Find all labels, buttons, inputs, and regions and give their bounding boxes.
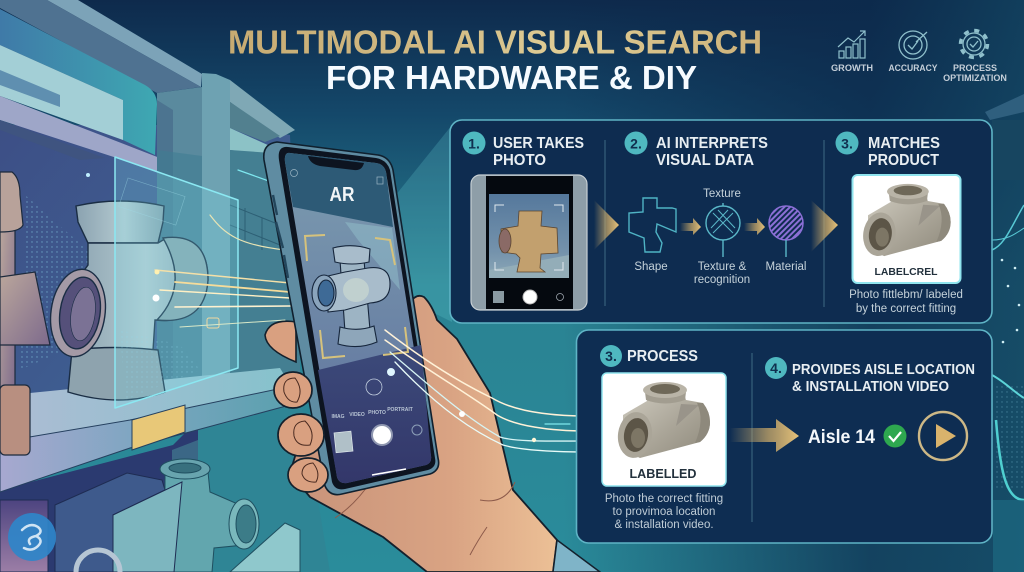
mode tabs: PHOTO [368,410,386,416]
bottom collar [68,348,165,400]
hand [265,296,600,572]
product card: LABELCREL [874,266,938,278]
screen [285,153,431,483]
step 3 badge [836,132,858,154]
gallery thumbnail [334,431,353,453]
top collar [76,201,164,243]
material icon [769,206,803,257]
labelled card [602,373,726,486]
AR label: AR [330,184,355,206]
right branch [157,237,208,320]
step 1 badge [462,132,486,154]
post [202,73,230,390]
shape icon [629,198,676,252]
phone body [264,142,439,495]
body [70,239,208,350]
slate soffit [0,0,201,93]
light streams across hand [385,330,593,455]
bronze cross fitting [499,211,558,272]
aisle label: Aisle 14 [808,427,875,448]
beam from phone to panel [362,125,452,322]
home bar [372,469,406,475]
yellow shelf label [132,405,185,450]
step 2 heading: AI INTERPRETS [656,135,768,152]
flash icon [290,170,298,176]
check icon [884,424,906,448]
texture top label: Texture [703,188,741,200]
shutter button [372,425,392,445]
store shelving scene [0,0,330,572]
panel: three step flow [450,120,992,323]
texture recognition label: Texture & [698,261,747,273]
step 1 badge: 1. [468,136,480,152]
under shelf wall [0,420,200,572]
shape label: Shape [634,261,668,273]
gold arrow [730,419,799,452]
mode tabs: PORTRAIT [387,407,413,413]
ring [76,550,120,572]
step 4 heading: PROVIDES AISLE LOCATION [792,362,975,378]
title line 1: MULTIMODAL AI VISUAL SEARCH [228,24,762,60]
small arrow 2 [744,218,765,235]
arrow 2 [811,200,838,252]
shelf surface [0,368,292,442]
right network decoration [985,94,1024,572]
screen lower section [318,345,431,483]
wall dot field [20,195,110,370]
small arrow 1 [680,218,701,235]
palm crease [335,480,515,555]
shelf front lip [0,386,292,492]
step 1 heading: PHOTO [493,152,546,169]
screen top band [285,153,393,227]
title line 2: FOR HARDWARE & DIY [326,59,697,96]
step 4 badge: 4. [770,360,782,376]
panel background [450,120,992,323]
back wall [0,125,300,470]
logo badge [8,513,56,561]
top strip [47,0,202,87]
camera brackets [305,235,408,358]
step 3 heading: PRODUCT [868,152,939,169]
light streams to fitting [86,170,290,327]
title [228,24,762,96]
step 2 badge [624,132,648,154]
icon: process gear [960,30,988,58]
play button [919,412,967,460]
fitting on screen [312,246,390,347]
step 4 heading: & INSTALLATION VIDEO [792,379,949,395]
product card [852,175,960,283]
step 2 badge: 2. [630,136,642,152]
arrow 1 [594,200,619,250]
teal window panel [0,9,157,155]
step 1 heading: USER TAKES [493,135,584,152]
icon: accuracy [899,31,927,59]
smartphone [264,142,439,495]
mode tabs: IMAG [331,414,345,420]
texture icon [706,203,740,257]
top right icon row [831,30,1007,83]
light panel [0,45,123,140]
black bezel [279,147,435,489]
AR hologram panel [115,157,238,408]
palm [290,296,557,572]
screen wall tone [345,222,400,290]
recessed column [157,87,202,385]
side buttons [273,195,288,278]
purple beam [0,96,165,172]
mode tabs: VIDEO [349,412,365,418]
process badge [600,345,622,367]
large grey fitting [45,201,208,400]
process caption: & installation video. [614,519,714,531]
sleeve [553,540,600,572]
mini phone camera [471,175,587,310]
material label: Material [766,261,806,273]
process caption: Photo the correct fitting [605,493,723,505]
light box front [113,482,182,572]
process heading: PROCESS [627,348,698,365]
process optimization label: OPTIMIZATION [943,73,1007,83]
camera shutter [523,290,537,304]
step 2 heading: VISUAL DATA [656,152,754,169]
labelled card: LABELLED [630,467,696,481]
icon: growth [838,31,865,58]
product caption: Photo fittlebm/ labeled [849,289,963,301]
product caption: by the correct fitting [856,303,956,315]
process badge: 3. [605,348,617,364]
accuracy label: ACCURACY [888,63,938,73]
index finger [265,321,296,362]
texture recognition label: recognition [694,274,750,286]
step 4 badge [765,357,787,379]
growth label: GROWTH [831,63,873,73]
camera zoom button [366,379,382,395]
panel background [576,330,992,543]
flip camera icon [412,425,422,435]
step 3 badge: 3. [841,136,853,152]
shelf lower right [230,523,300,572]
panel: result [576,330,992,543]
process optimization label: PROCESS [953,63,997,73]
front fingers [274,372,328,492]
notch [308,156,364,170]
right wall [230,80,295,138]
left opening [45,266,111,360]
purple box [0,500,48,572]
small teal fitting [160,459,259,572]
dark box [55,473,165,572]
process caption: to provimoa location [613,506,715,518]
top right icon [377,177,383,184]
brown pipe left [0,172,50,455]
step 3 heading: MATCHES [868,135,940,152]
